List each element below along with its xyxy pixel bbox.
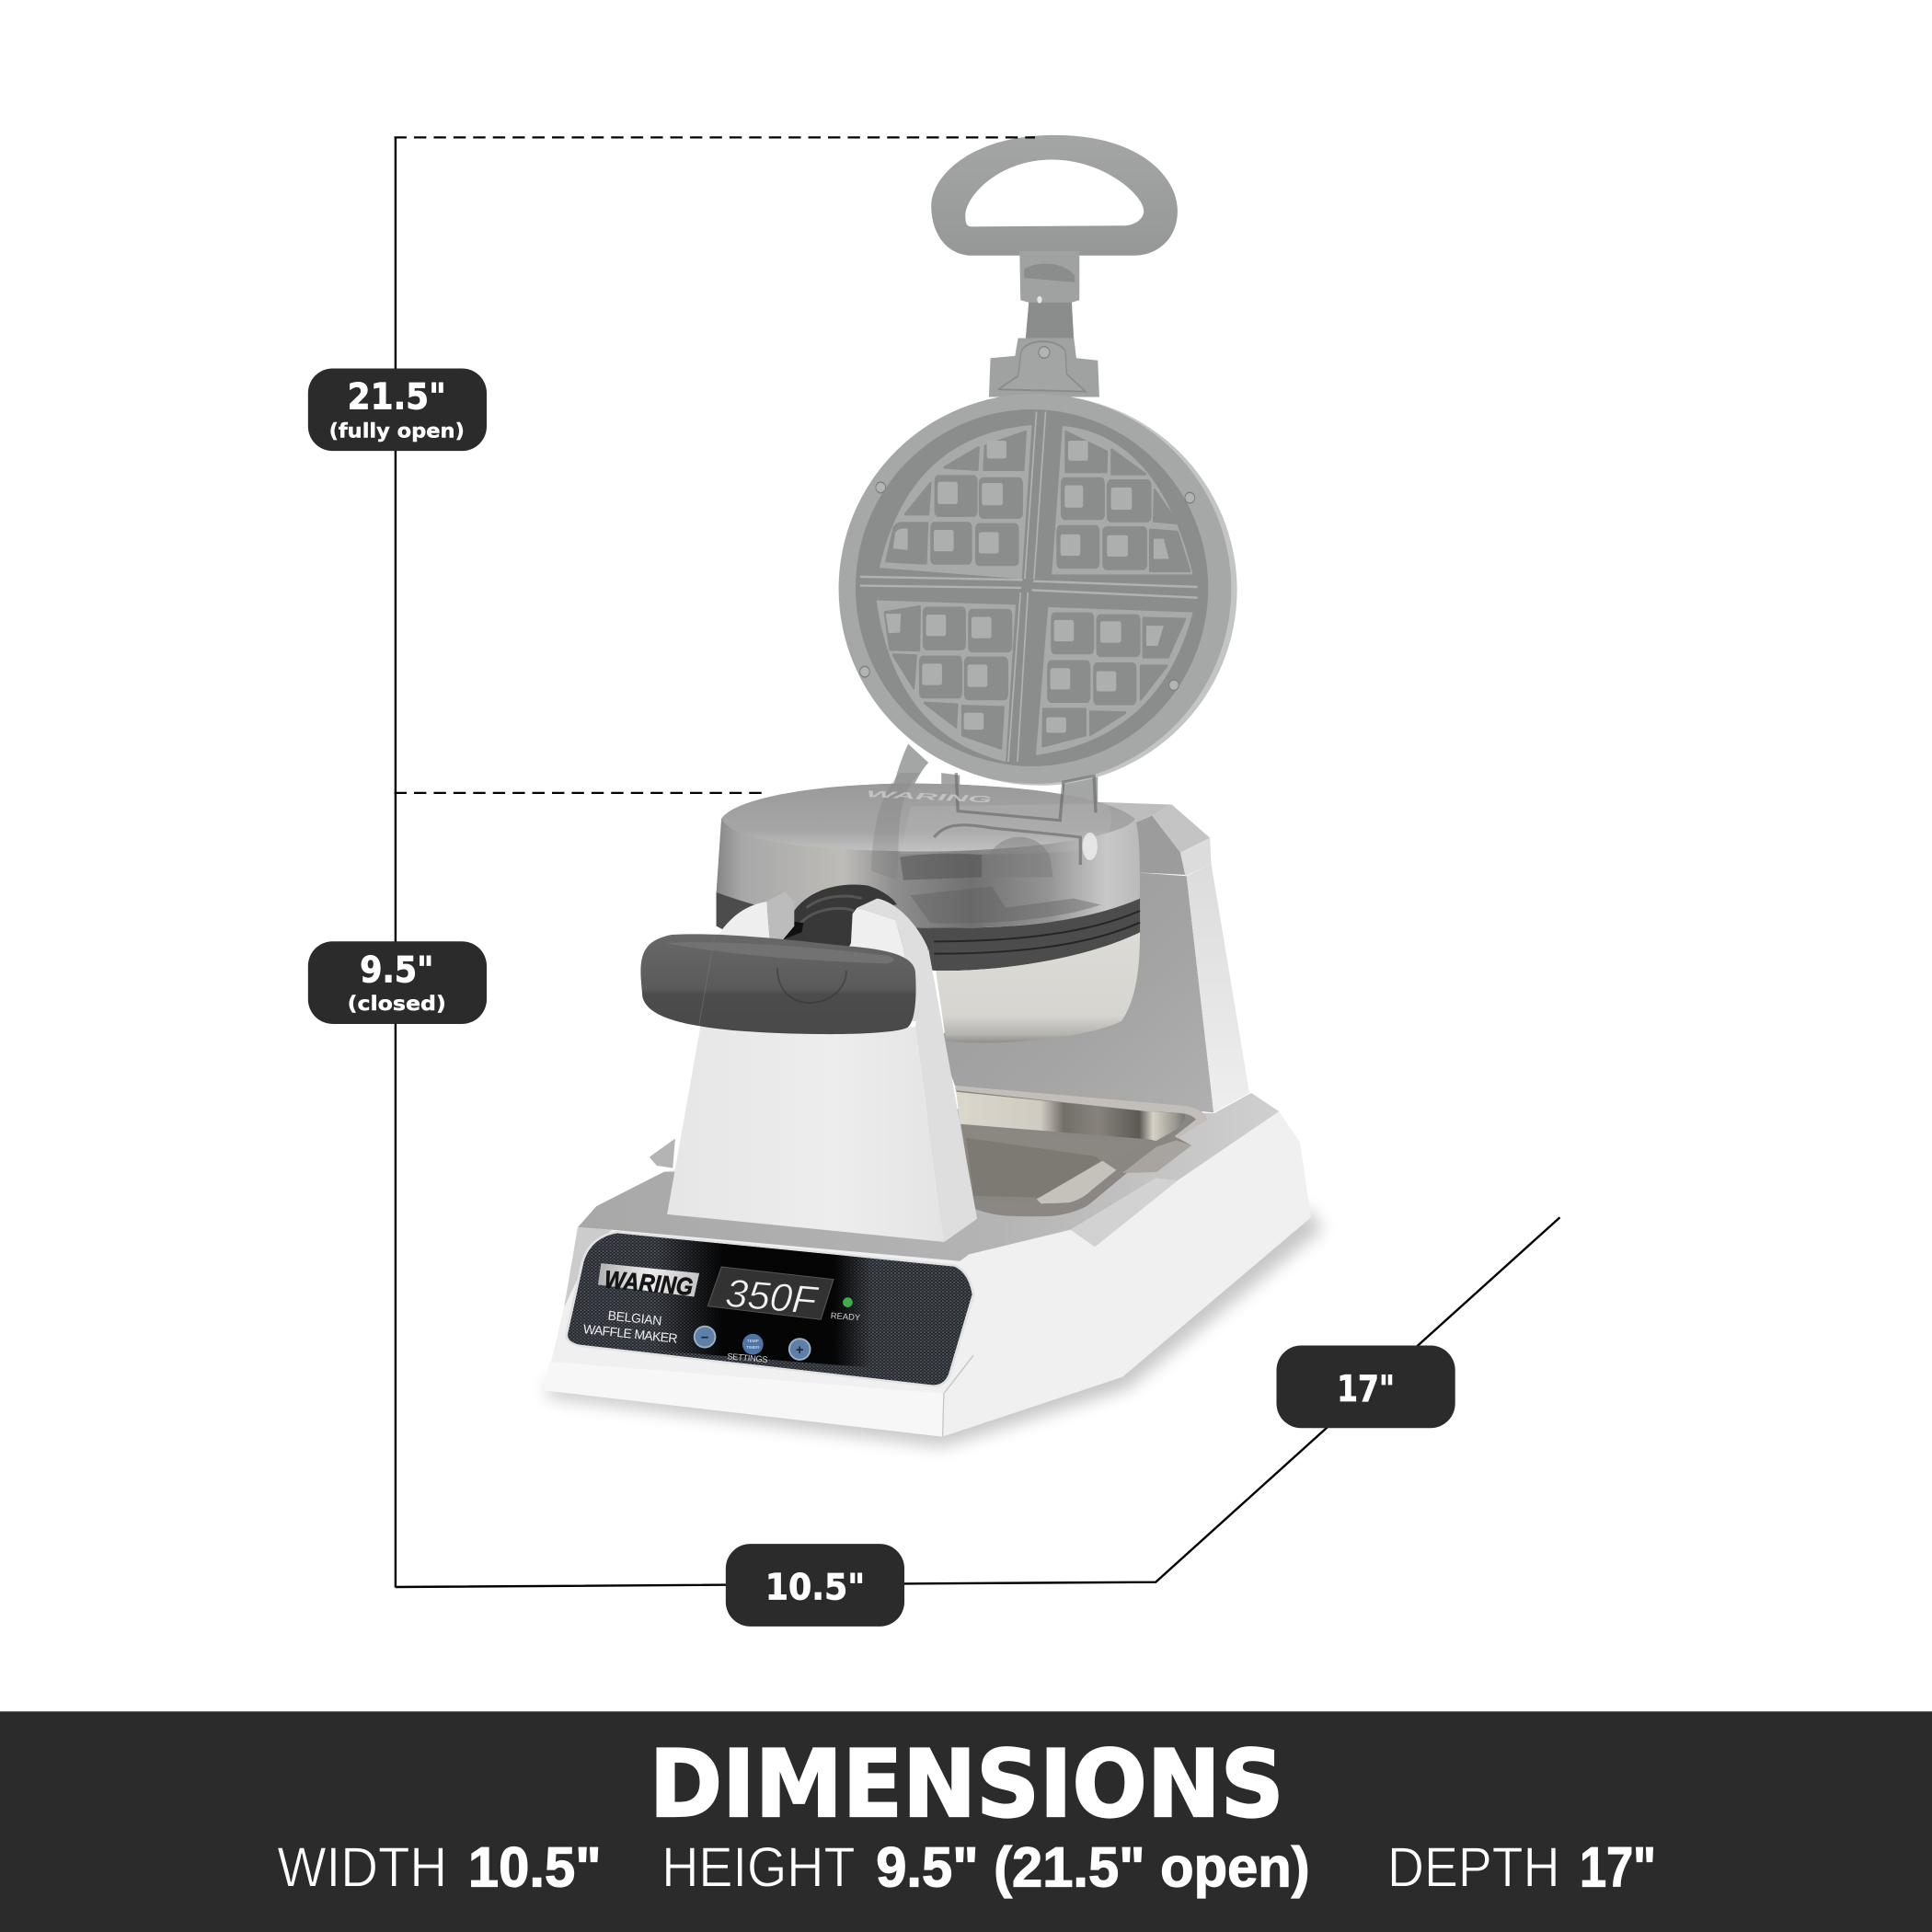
dimension lines [395, 137, 1560, 1588]
tray handle tab [1122, 1140, 1191, 1173]
waffle maker product illustration [544, 135, 1323, 1446]
left ear front [702, 902, 791, 1012]
control panel [567, 1232, 973, 1386]
right ear edge facet [857, 899, 941, 1021]
minus button: − [701, 1330, 708, 1345]
belgian label: BELGIAN [607, 1307, 662, 1328]
plate quadrant outlines [877, 425, 1193, 762]
rear cap strip [1180, 838, 1212, 876]
left ear side [766, 891, 794, 941]
open lid handle [931, 135, 1178, 256]
label: 21.5 inch fully open: 21.5" [348, 377, 446, 419]
title: DIMENSIONS [650, 1731, 1284, 1838]
label: 21.5 inch fully open [308, 368, 487, 451]
tray front lip [973, 1171, 1129, 1216]
plate cell centers [886, 441, 1169, 733]
label: 9.5 inch closed: 9.5" [360, 949, 433, 991]
rear cap inner [1134, 816, 1185, 875]
dark gasket band [717, 892, 1140, 971]
ghost arm tube [871, 773, 920, 880]
height axis line [395, 137, 397, 1588]
plate screws [860, 347, 1195, 690]
settings label: SETTINGS [727, 1351, 768, 1364]
base chamfer facet [1070, 1178, 1178, 1247]
open lid arms [886, 744, 1098, 819]
plate cross channels [860, 411, 1198, 762]
ghost open lid over closed lid [900, 803, 1111, 855]
width spec: 10.5" [468, 1835, 602, 1899]
base body [544, 1093, 1311, 1437]
tray back wall [956, 1092, 1185, 1141]
ghost pivot [1083, 833, 1098, 860]
open lid stem [989, 251, 1099, 397]
ghost disc [985, 837, 1053, 877]
temperature display box [707, 1267, 834, 1319]
panel mesh background [567, 1232, 973, 1386]
tray floor [961, 1127, 1147, 1199]
label: 17 inch depth [1277, 1345, 1455, 1428]
label: 10.5 inch width: 10.5" [765, 1567, 865, 1608]
handle ghost stem [777, 968, 846, 1003]
label: 21.5 inch fully open: (fully open) [329, 420, 465, 443]
lid top face [721, 784, 1135, 852]
rear column [937, 802, 1249, 1112]
waffle maker label: WAFFLE MAKER [582, 1321, 678, 1346]
label: 10.5 inch width [726, 1544, 904, 1627]
open plate outer ring [839, 394, 1231, 784]
closed height dashed guide [395, 792, 764, 794]
post right facet [915, 949, 977, 1242]
height spec: HEIGHT [661, 1835, 855, 1899]
plus button [789, 1339, 811, 1360]
base left facet [564, 1227, 611, 1307]
handle grip body [640, 934, 916, 1034]
stem shadow details [1024, 264, 1075, 338]
base front lower lip [544, 1362, 944, 1437]
lid side wall [717, 784, 1140, 928]
rear column side strip [1187, 864, 1249, 1112]
footer banner [0, 1711, 1932, 1932]
waring logo: WARING [604, 1266, 694, 1301]
label: 9.5 inch closed: (closed) [348, 993, 446, 1016]
lid inner shadow [900, 854, 982, 880]
band grooves [934, 911, 1140, 954]
knob ribbing [800, 896, 862, 923]
base top surface [578, 1093, 1279, 1261]
right ear front [816, 908, 914, 1021]
open height dashed guide [395, 136, 1035, 138]
panel center gloss [581, 1234, 954, 1374]
tray left edge [650, 1139, 675, 1168]
ready led [843, 1297, 853, 1307]
stem pin [1037, 296, 1042, 304]
front handle [640, 934, 916, 1034]
tray top rim [955, 1086, 1207, 1138]
tray floor inner panel [966, 1138, 1101, 1198]
height spec [661, 1835, 1310, 1899]
temp timer button: TEMP [747, 1339, 759, 1343]
width and depth line [396, 1217, 1560, 1587]
handle ghost edge [699, 937, 715, 1024]
handle inner top face [665, 942, 894, 963]
embossed lid brand: WARING [866, 788, 992, 805]
temp timer button: TIMER [746, 1345, 760, 1350]
ghost hinge outline [934, 773, 1096, 865]
open plate inner [856, 409, 1208, 766]
ready label: READY [831, 1311, 861, 1322]
open plate rim highlight [844, 395, 1237, 786]
minus button [695, 1327, 715, 1348]
drip tray [955, 1086, 1207, 1216]
ghost waffle plate shapes [910, 886, 1101, 924]
rear cap top [1100, 802, 1172, 823]
plus button: + [796, 1343, 804, 1358]
tray right rim [1037, 1161, 1116, 1205]
closed lid and cooking plates [717, 773, 1140, 1043]
stem hinge plate [998, 341, 1086, 392]
depth spec: 17" [1580, 1835, 1656, 1899]
open upper lid, ghosted [839, 135, 1237, 819]
tray body [955, 1086, 1207, 1216]
label: 17 inch depth: 17" [1337, 1369, 1395, 1410]
base corner crease [943, 1355, 973, 1437]
rear column inner wall [937, 872, 1213, 1112]
width spec: WIDTH [277, 1835, 447, 1899]
post lower section [667, 949, 977, 1242]
hinge knob [782, 885, 897, 946]
waring badge plate [598, 1263, 699, 1297]
panel text [582, 1266, 861, 1364]
label: 9.5 inch closed [308, 941, 487, 1024]
temperature readout: 350F [724, 1271, 821, 1323]
base shadow [548, 1207, 1323, 1446]
knob latch [780, 921, 803, 940]
height spec: 9.5" (21.5" open) [876, 1835, 1310, 1899]
post upper section [702, 885, 941, 1021]
post front face [667, 1027, 944, 1242]
front support post [667, 885, 977, 1242]
depth spec: DEPTH [1387, 1835, 1560, 1899]
rear cap facet [1152, 805, 1210, 853]
width spec [277, 1835, 602, 1899]
plate cells [885, 431, 1190, 749]
lower plate body [936, 932, 1140, 1043]
temp timer button [742, 1334, 764, 1355]
